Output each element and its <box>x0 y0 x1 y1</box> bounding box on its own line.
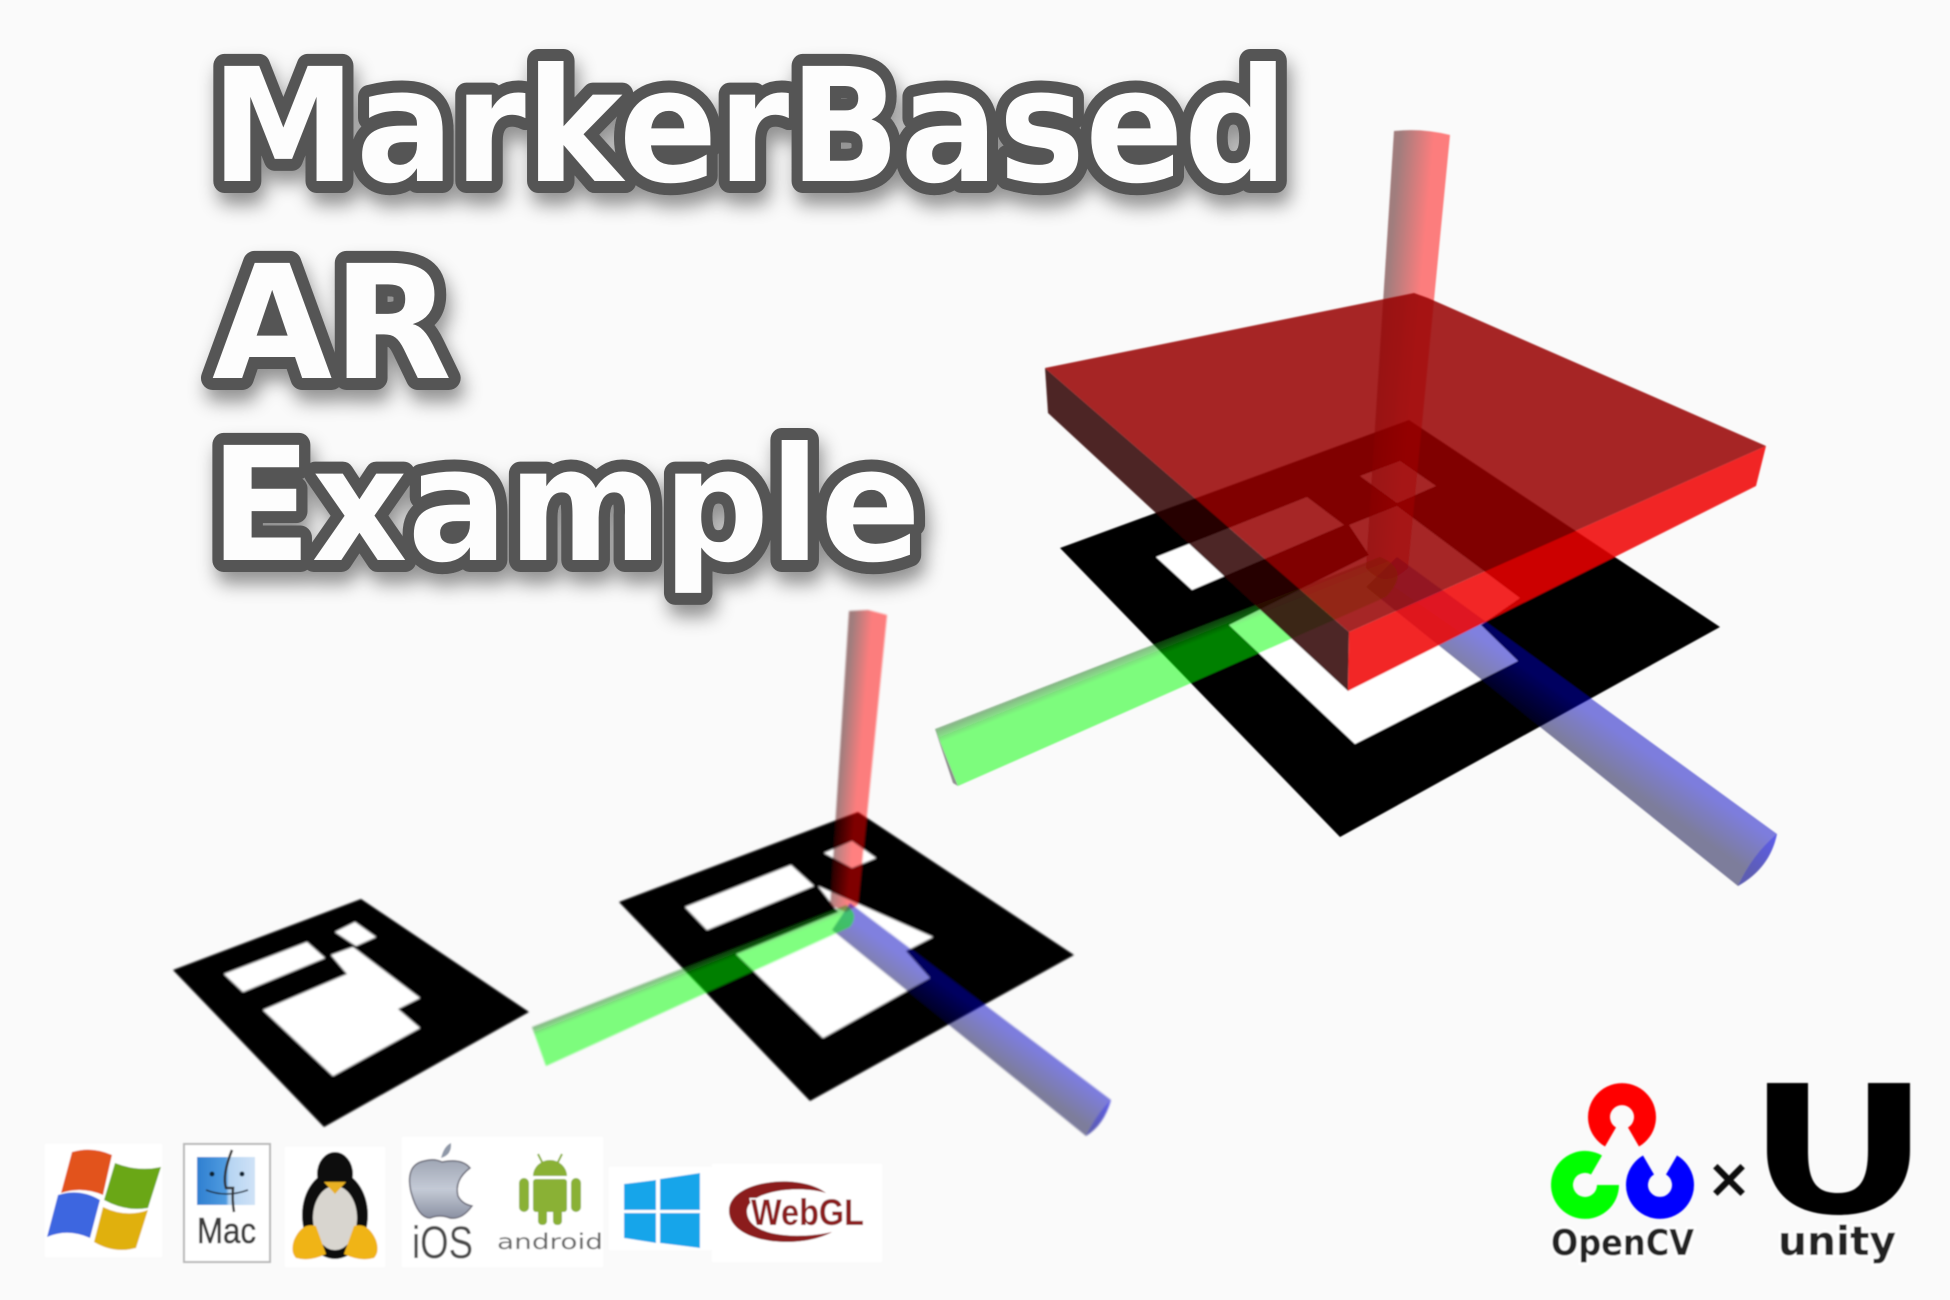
medium green axis <box>532 905 854 1066</box>
large marker white cells <box>1156 461 1520 744</box>
icon: Apple <box>410 1143 472 1218</box>
OpenCV label: OpenCV <box>1551 1223 1694 1264</box>
red cube <box>1045 293 1766 691</box>
small AR marker without axes <box>173 899 529 1127</box>
multiplication sign: × <box>1706 1147 1752 1210</box>
title: AR <box>212 232 452 416</box>
large marker square <box>1060 420 1720 837</box>
icon: WebGL <box>712 1164 882 1262</box>
icon: iOS and Android panel <box>402 1137 603 1268</box>
icon: Android robot <box>519 1154 581 1225</box>
Unity label: unity <box>1778 1219 1896 1265</box>
title <box>210 35 1288 598</box>
OpenCV and Unity logos <box>1551 1083 1910 1265</box>
large AR marker with axes and red cube <box>935 130 1777 886</box>
large blue axis <box>1366 557 1777 886</box>
icon: Unity U <box>1767 1083 1910 1215</box>
icon: OpenCV rings <box>1562 1094 1683 1208</box>
medium blue axis <box>832 903 1111 1136</box>
icon: Windows flag <box>45 1144 162 1257</box>
large green axis <box>935 557 1398 786</box>
medium red axis <box>830 610 887 912</box>
iOS label: iOS <box>412 1217 473 1268</box>
title: MarkerBased <box>211 35 1288 219</box>
title: Example <box>210 414 921 598</box>
icon: Linux penguin <box>285 1147 385 1267</box>
Android label: android <box>497 1230 603 1254</box>
icon: Mac finder: Mac <box>197 1210 256 1251</box>
icon: Windows 8 <box>609 1167 712 1250</box>
large red axis <box>1366 130 1450 579</box>
icon: WebGL: WebGL <box>751 1192 864 1233</box>
icon: Mac finder <box>184 1144 270 1262</box>
medium AR marker with coordinate axes <box>532 610 1111 1136</box>
platform logos row <box>45 1137 882 1268</box>
